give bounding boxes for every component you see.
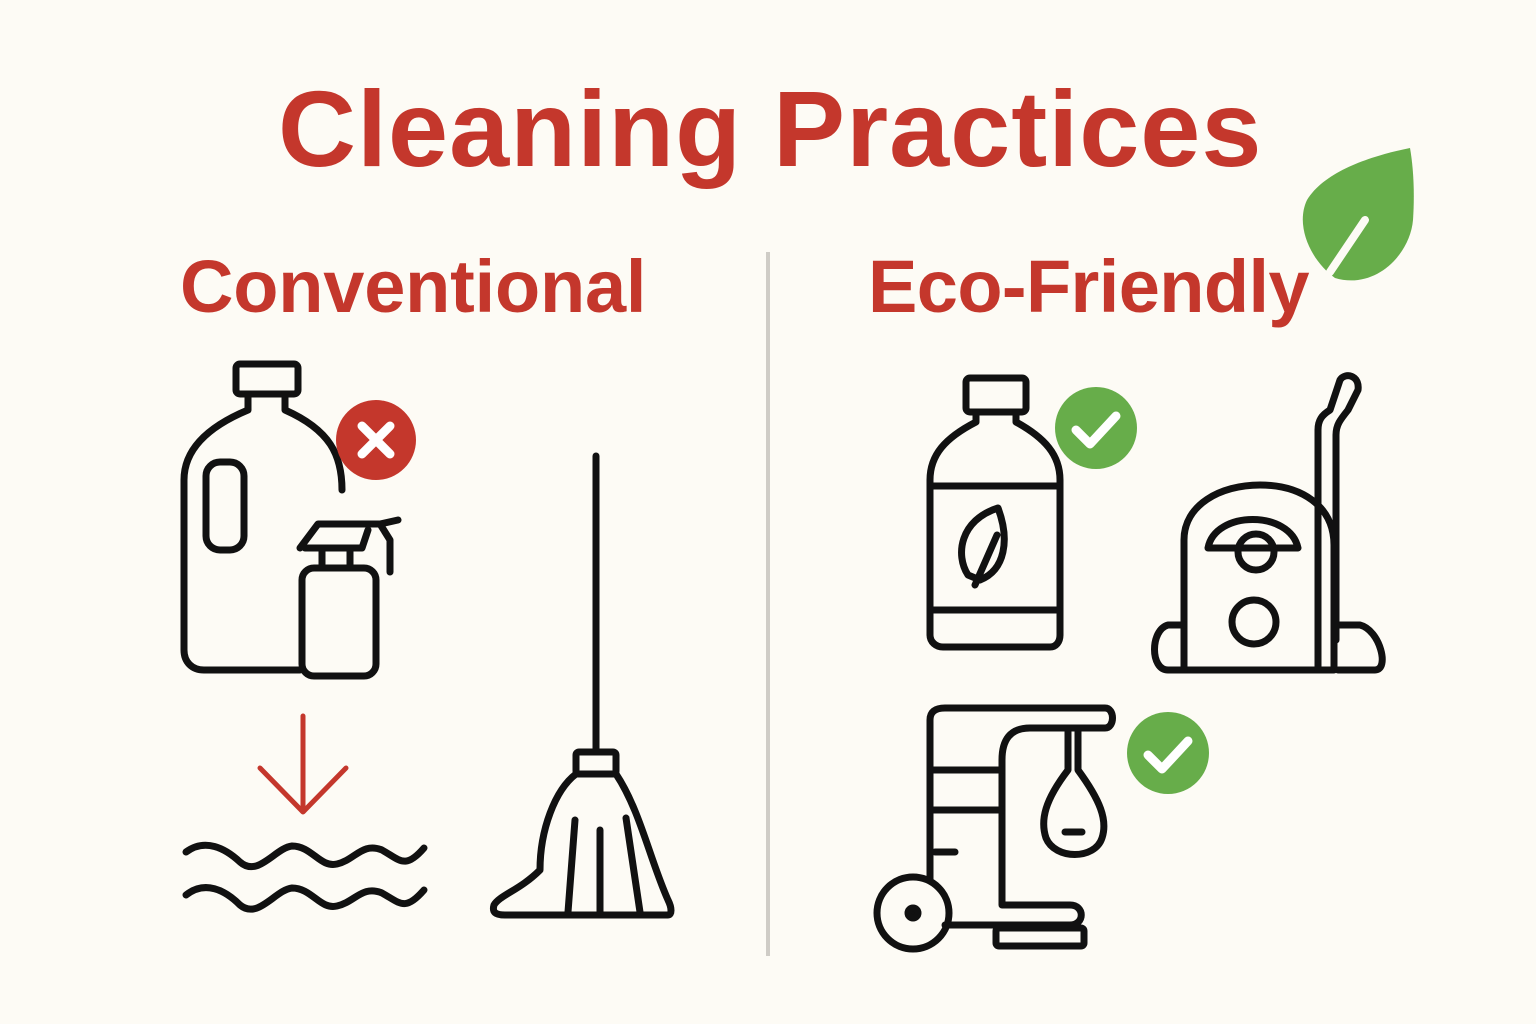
icon: spray bottle xyxy=(300,520,398,676)
arrow: down xyxy=(260,716,346,812)
icon: waves xyxy=(186,845,424,909)
icon: check badge 2 xyxy=(1127,712,1209,794)
icon: floor scrubber xyxy=(877,708,1112,949)
divider xyxy=(766,252,770,956)
icon: leaf xyxy=(1302,148,1414,280)
icon: red x badge xyxy=(336,400,416,480)
panel: conventional icons xyxy=(180,360,674,918)
icon: eco bottle xyxy=(930,378,1060,647)
title: Cleaning Practices xyxy=(278,68,1262,189)
heading: eco-friendly: Eco-Friendly xyxy=(868,245,1309,328)
icon: jug xyxy=(184,364,342,670)
icon: check badge 1 xyxy=(1055,387,1137,469)
icon: mop xyxy=(493,456,671,915)
panel: eco-friendly icons xyxy=(874,372,1386,952)
icon: vacuum xyxy=(1154,376,1382,670)
heading: conventional: Conventional xyxy=(180,245,646,328)
